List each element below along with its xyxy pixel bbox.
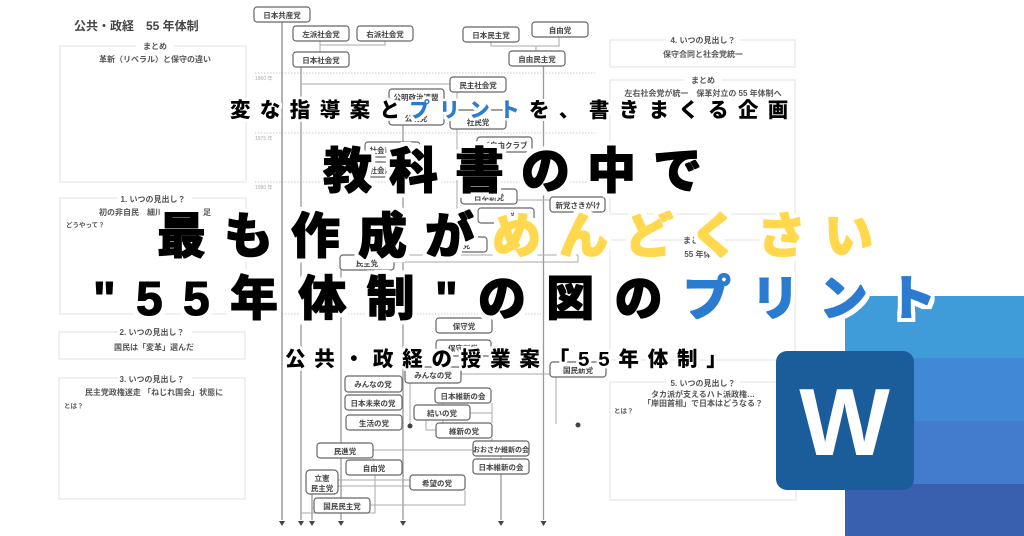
party boxes: 日本未来の党	[350, 398, 396, 408]
panel: summary: まとめ	[143, 42, 167, 51]
party boxes: 自由党	[448, 240, 471, 250]
panel: section 2	[59, 327, 245, 359]
arrowheads	[279, 422, 580, 526]
party boxes: 民主社会党	[459, 80, 497, 90]
panel: summary: 革新（リベラル）と保守の違い	[99, 54, 211, 64]
year markers: 1990 年	[255, 184, 273, 191]
panel: summary right	[610, 76, 795, 214]
panel: lower summary: まとめ	[683, 236, 707, 245]
panel: lower summary	[610, 236, 795, 360]
party boxes: 希望の党	[422, 478, 452, 488]
party boxes: みんなの党	[354, 379, 392, 389]
panel: section 4: 4. いつの見出し？	[671, 35, 735, 45]
headline overlay	[93, 98, 956, 371]
party boxes: 新自由クラブ	[482, 140, 528, 150]
panel: section 5: とは？	[614, 407, 634, 415]
logo square with W	[776, 351, 914, 490]
main headline line 1: 教科書の中で	[323, 145, 719, 199]
worksheet title: 公共・政経 55 年体制	[74, 18, 199, 33]
party boxes: 生活の党	[359, 418, 389, 428]
party boxes: 公明党	[405, 113, 428, 123]
connector lines	[282, 22, 578, 520]
panel: section 5: 「岸田首相」で日本はどうなる？	[643, 398, 763, 408]
party boxes: 国民民主党	[323, 501, 361, 511]
party boxes: 日本社会党	[302, 55, 340, 65]
party boxes: 新党さきがけ	[556, 200, 600, 210]
party boxes	[254, 7, 606, 513]
party boxes: 日本共産党	[263, 10, 301, 20]
party boxes: 左派社会党	[302, 29, 340, 39]
panel: lower summary: 55 年体制.	[684, 249, 722, 259]
main headline line 3: "55年体制"の図のプリント	[93, 273, 956, 326]
party boxes: 新進党	[495, 211, 518, 221]
panel: section 1: どうやって？	[66, 220, 105, 229]
party boxes: 民主党	[356, 258, 379, 268]
panel: section 3	[59, 374, 245, 499]
panel: section 5: 5. いつの見出し？	[671, 378, 735, 388]
panel: section 4	[610, 35, 795, 67]
party boxes: 社会市民連合	[370, 145, 415, 155]
party boxes: 右派社会党	[366, 29, 404, 39]
party boxes: 日本維新の会	[478, 462, 524, 472]
worksheet right column	[610, 35, 796, 500]
party lineage diagram	[254, 7, 606, 526]
party boxes: 維新の党	[449, 426, 479, 436]
subtitle: 公共・政経の授業案「55年体制」	[285, 347, 736, 371]
panel: section 5: タカ派が支えるハト派政権…	[651, 389, 755, 399]
panel: section 1	[60, 194, 246, 314]
icon: Word logo	[776, 296, 1024, 536]
party boxes: 社民党	[467, 117, 490, 127]
year markers	[255, 73, 595, 314]
panel: section 2: 国民は「変革」選んだ	[114, 342, 194, 352]
panel: section 2: 2. いつの見出し？	[120, 327, 184, 337]
party boxes: みんなの党	[414, 370, 452, 380]
main headline line 2: 最も作成がめんどくさい	[157, 209, 891, 264]
party boxes: 自由党	[549, 25, 572, 35]
party boxes: 自由党	[363, 463, 386, 473]
year markers: 1960 年	[255, 75, 273, 82]
panel: section 5	[610, 378, 796, 500]
worksheet left column	[59, 18, 246, 499]
party boxes: 自由民主党	[518, 54, 556, 64]
party boxes: 立憲	[314, 473, 330, 483]
panel: summary right: まとめ	[691, 76, 715, 85]
party boxes: 社会民主連合	[370, 165, 415, 175]
logo colour bands	[845, 296, 1024, 536]
panel: section 3: 3. いつの見出し？	[120, 374, 184, 384]
party boxes: 民進党	[334, 446, 357, 456]
party boxes: 日本新党	[474, 192, 504, 202]
party boxes: おおさか維新の会	[473, 445, 529, 454]
panel: section 4: 保守合同と社会党統一	[663, 49, 743, 59]
party boxes: 保守新党	[448, 343, 478, 353]
party boxes: 公明政治連盟	[394, 92, 439, 102]
party boxes: 結いの党	[427, 408, 457, 418]
logo square with W: W	[799, 369, 890, 476]
panel: summary	[60, 42, 246, 182]
party boxes: 日本維新の会	[440, 391, 486, 401]
panel: section 1: 初の非自民 細川連立内閣発足	[99, 207, 211, 217]
party boxes: 保守党	[453, 321, 476, 331]
tagline: 変な指導案とプリントを、書きまくる企画	[230, 98, 798, 122]
panel: section 3: とは？	[64, 402, 84, 410]
party boxes: 国民新党	[563, 365, 593, 375]
panel: section 1: 1. いつの見出し？	[121, 194, 185, 204]
panel: section 3: 民主党政権迷走 「ねじれ国会」状態に	[85, 387, 223, 397]
year markers: 1975 年	[255, 135, 273, 142]
party boxes: 民主党	[311, 483, 334, 493]
panel: summary right: 左右社会党が統一 保革対立の 55 年体制へ	[624, 88, 782, 98]
party boxes: 日本民主党	[472, 30, 510, 40]
